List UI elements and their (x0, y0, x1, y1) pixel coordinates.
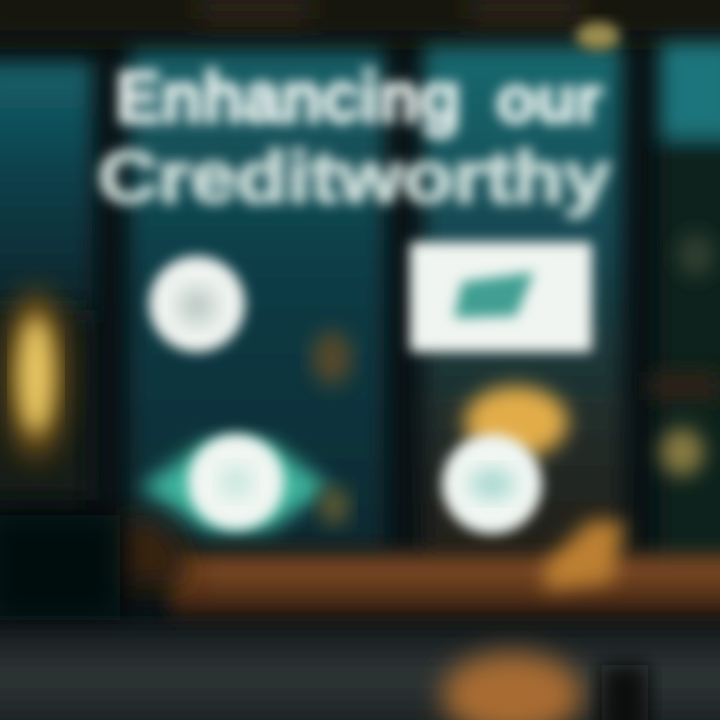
small amber orb (312, 331, 352, 385)
right side lights (650, 233, 720, 476)
title: Creditworthy (98, 138, 610, 218)
glowing wall lamp (6, 290, 66, 460)
dark left base (0, 515, 120, 620)
panel: left window (0, 62, 92, 322)
panel: right window (424, 46, 622, 552)
title (98, 58, 610, 218)
top ceiling strip (0, 0, 720, 40)
icon: white circle (149, 256, 245, 352)
small olive orb (319, 487, 349, 525)
icon: credit card panel (410, 242, 592, 352)
title: Enhancing (116, 58, 461, 138)
icon: eye (140, 434, 330, 530)
floor (0, 626, 720, 720)
table (120, 515, 720, 622)
panel: far right window (660, 42, 720, 560)
panel: centre window (130, 50, 384, 546)
pendant lamp top right (576, 22, 620, 50)
panel: lower left dark window (0, 310, 86, 500)
title: our (496, 62, 602, 136)
icon: yellow glow and badge circle (442, 386, 568, 534)
